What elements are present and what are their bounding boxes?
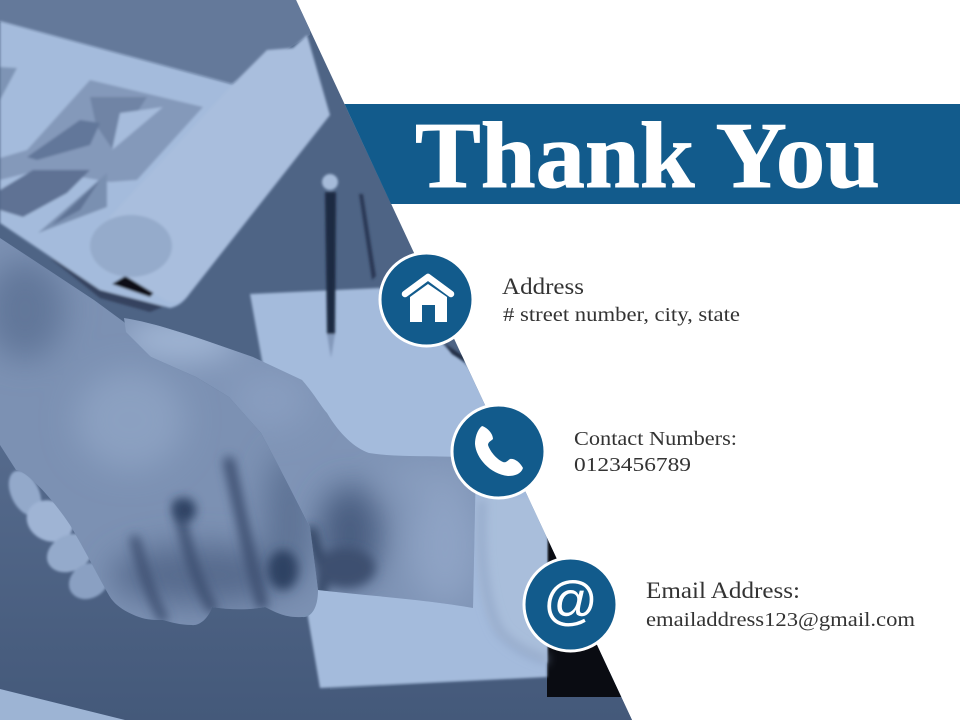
shirt cuff <box>529 500 549 664</box>
icon: at sign: @ <box>543 571 598 631</box>
icon: at sign <box>524 558 617 651</box>
finger: first knuckle <box>8 470 42 516</box>
text: email address <box>646 578 915 631</box>
rolled page <box>110 35 330 302</box>
shadow under document <box>53 260 162 312</box>
finger creases <box>135 462 262 618</box>
text: email address: emailaddress123@gmail.com <box>646 609 915 631</box>
black shadow bottom right <box>547 538 622 697</box>
text: email address: Email Address: <box>646 578 800 603</box>
bottom hand fingers <box>8 470 106 600</box>
pen on paper edge <box>444 343 466 362</box>
title: Thank You <box>415 104 880 208</box>
upper desk background <box>0 0 640 720</box>
hand highlights and shadows <box>0 260 315 605</box>
text: contact numbers: 0123456789 <box>574 454 691 476</box>
finger: second <box>25 498 74 544</box>
light table strip bottom-left <box>0 689 125 720</box>
cuff hem shading <box>481 500 547 660</box>
dark top desk area <box>0 0 310 84</box>
text: address: # street number, city, state <box>503 304 740 326</box>
roll end <box>90 215 172 277</box>
icon: phone <box>452 405 545 498</box>
pencil <box>322 174 376 358</box>
document on desk <box>0 21 330 312</box>
text: address: Address <box>502 274 584 299</box>
document page <box>0 20 236 310</box>
knuckle marks <box>174 498 298 590</box>
panel: handshake photo <box>0 0 640 720</box>
finger: fourth <box>68 562 106 600</box>
printed chart on page <box>0 80 203 182</box>
lower wooden table <box>0 672 632 720</box>
right hand and wrist <box>120 310 480 610</box>
title banner <box>344 104 960 208</box>
white paper sheet under hands <box>250 288 547 688</box>
left hand <box>0 230 330 630</box>
text: contact numbers: Contact Numbers: <box>574 428 737 450</box>
finger: third <box>46 532 90 574</box>
icon: house <box>380 253 473 346</box>
text: address <box>502 274 740 326</box>
black underside of page <box>112 275 154 298</box>
text: contact numbers <box>574 428 737 476</box>
